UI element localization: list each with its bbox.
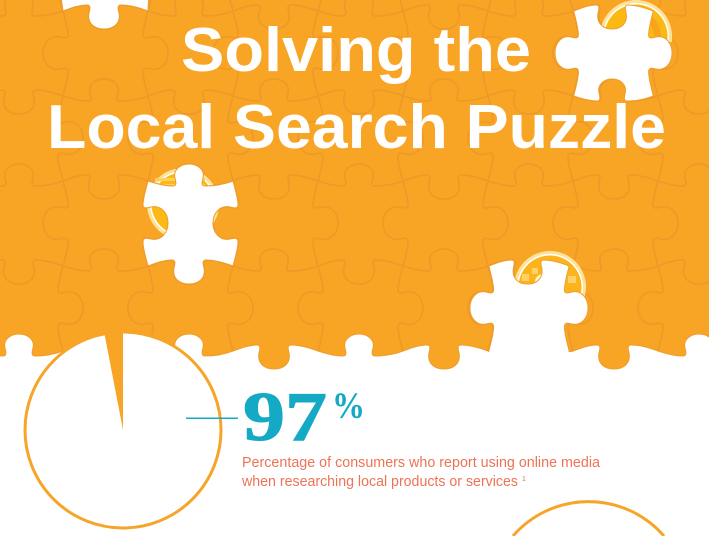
icon: lemon slice behind lower gap — [514, 251, 586, 323]
missing puzzle piece: top right — [555, 5, 672, 101]
pie chart: 97 percent — [25, 331, 221, 528]
leader line — [186, 417, 238, 419]
missing puzzle piece: lower — [470, 260, 588, 375]
title: Local Search Puzzle — [47, 93, 666, 162]
title: Solving the — [181, 16, 531, 85]
statistic: 97%: % — [332, 386, 365, 427]
next pie chart (cropped) — [513, 502, 664, 536]
description text — [241, 455, 601, 490]
description text: Percentage of consumers who report using online media — [242, 455, 601, 471]
statistic: 97%: 97 — [243, 379, 327, 456]
title — [47, 16, 666, 162]
orange puzzle background — [0, 0, 709, 369]
description text: when researching local products or services — [241, 474, 518, 490]
description text: 1 — [522, 476, 526, 483]
icon: lemon slice behind left gap — [147, 168, 219, 240]
icon: lemon slice behind top-right gap — [600, 0, 672, 69]
panel: orange puzzle band — [0, 0, 709, 369]
statistic: 97% — [243, 379, 365, 456]
missing puzzle piece: left — [143, 164, 238, 284]
missing puzzle piece: top left — [60, 0, 149, 29]
white cover under lower piece — [484, 352, 578, 382]
